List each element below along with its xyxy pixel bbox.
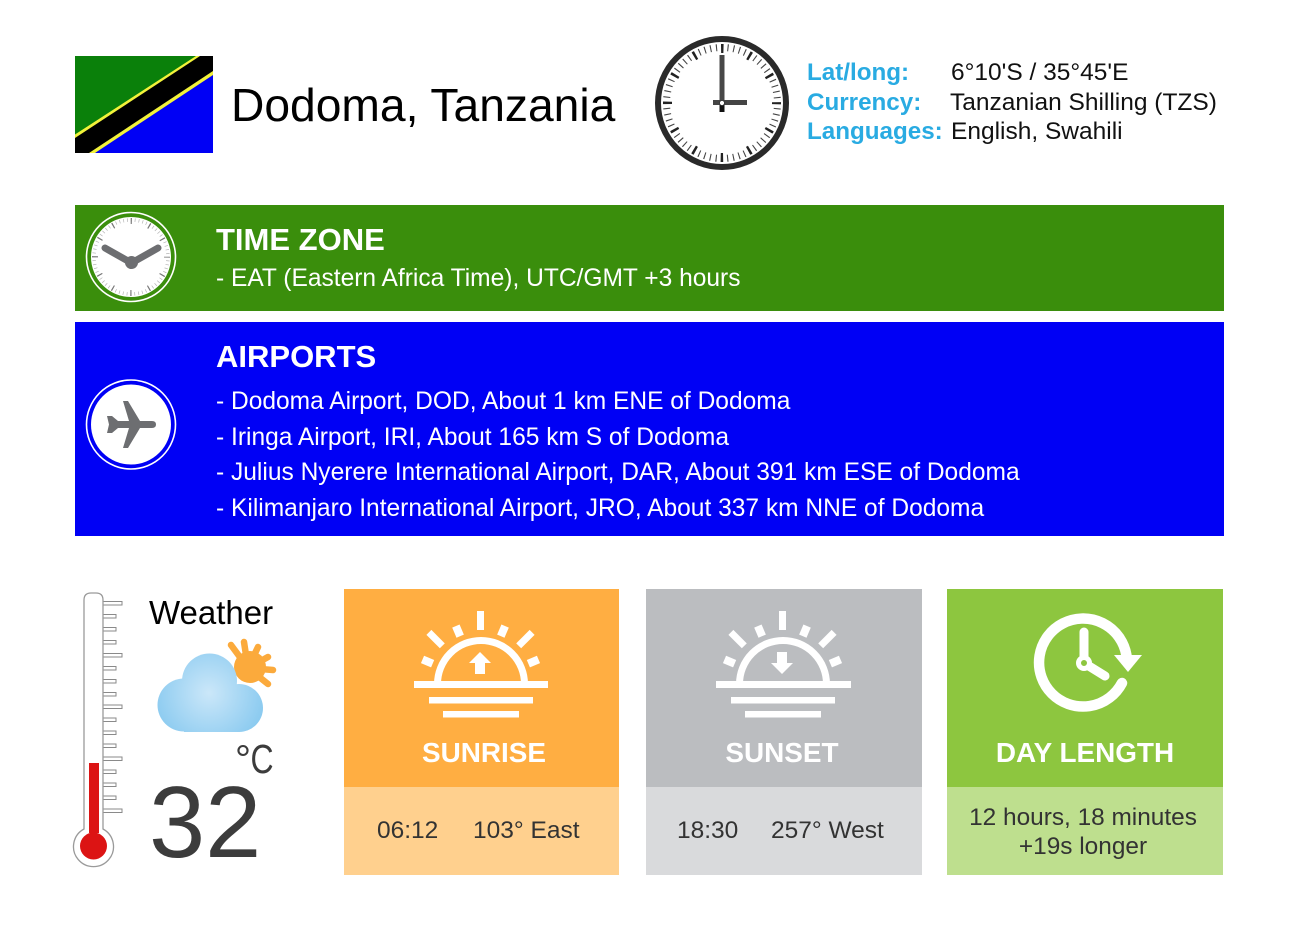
languages row: Languages: (807, 118, 943, 145)
label: day length: DAY LENGTH (996, 737, 1174, 768)
sunrise details: 103° East (473, 817, 580, 844)
languages row (807, 118, 1123, 145)
currency row: Tanzanian Shilling (TZS) (950, 89, 1217, 116)
day length details: +19s longer (1019, 833, 1147, 860)
lat/long row: 6°10'S / 35°45'E (951, 59, 1128, 86)
flag of Tanzania (75, 56, 213, 153)
icon: sun behind cloud (158, 642, 273, 732)
icon: airplane (86, 380, 176, 469)
heading: airports: AIRPORTS (216, 339, 376, 374)
lat/long row (807, 59, 1128, 86)
sunrise details (377, 817, 580, 844)
icon: time zone clock (86, 212, 176, 302)
panel: day length (947, 589, 1223, 875)
languages row: English, Swahili (951, 118, 1123, 145)
temperature unit: ° (235, 738, 251, 782)
panel: sunrise (344, 589, 619, 875)
time zone text: - EAT (Eastern Africa Time), UTC/GMT +3 hours (216, 265, 740, 292)
sunset details: 18:30 (677, 817, 738, 844)
sunset details (677, 817, 884, 844)
icon: day length clock (1039, 619, 1142, 707)
temperature value: 32 (149, 767, 261, 879)
temperature unit: C (250, 736, 274, 782)
day length details: 12 hours, 18 minutes (969, 804, 1197, 831)
icon: sunset (716, 611, 851, 718)
temperature unit (235, 736, 274, 782)
location facts (807, 59, 1217, 145)
sunrise details: 06:12 (377, 817, 438, 844)
icon: large wall clock showing 3 o'clock (658, 39, 786, 167)
panel: time zone (75, 205, 1224, 311)
panel: airports (75, 322, 1224, 536)
icon: sunrise (414, 611, 548, 718)
currency row: Currency: (807, 89, 921, 116)
heading: time zone: TIME ZONE (216, 222, 385, 257)
airport list (216, 388, 1020, 522)
title: Dodoma, Tanzania (231, 79, 616, 131)
sunset details: 257° West (771, 817, 884, 844)
airport list: - Iringa Airport, IRI, About 165 km S of Dodoma (216, 424, 729, 451)
airport list: - Julius Nyerere International Airport, DAR, About 391 km ESE of Dodoma (216, 459, 1020, 486)
day length details (969, 804, 1197, 860)
airport list: - Dodoma Airport, DOD, About 1 km ENE of Dodoma (216, 388, 791, 415)
currency row (807, 89, 1217, 116)
heading: weather: Weather (149, 594, 273, 631)
panel: sunset (646, 589, 922, 875)
label: sunrise: SUNRISE (422, 737, 546, 768)
icon: thermometer (74, 593, 122, 867)
lat/long row: Lat/long: (807, 59, 909, 86)
airport list: - Kilimanjaro International Airport, JRO, About 337 km NNE of Dodoma (216, 495, 984, 522)
label: sunset: SUNSET (725, 737, 839, 768)
